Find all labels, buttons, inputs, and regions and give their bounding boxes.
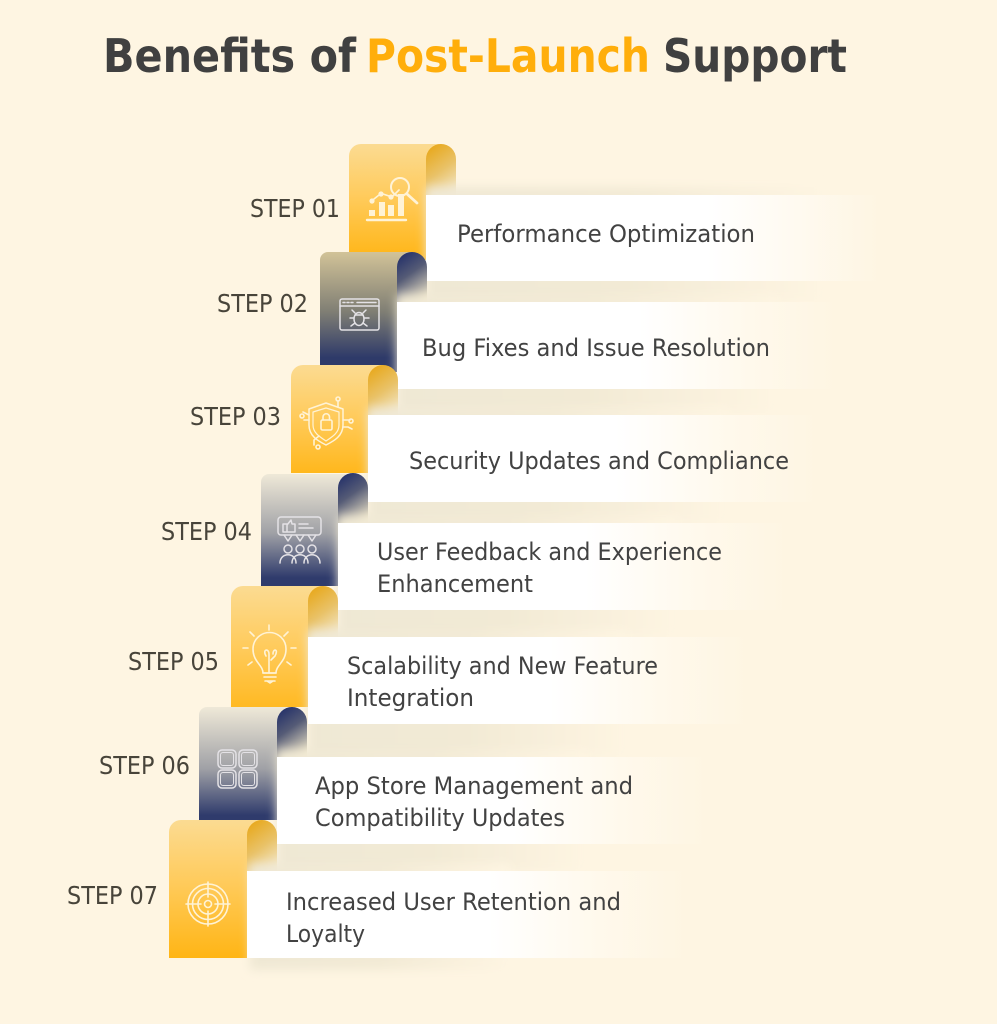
heading line 2: Integration <box>347 684 474 712</box>
ribbon <box>199 707 292 830</box>
icon: target <box>186 882 230 926</box>
step 03 <box>190 365 818 523</box>
heading: App Store Management and <box>315 772 633 800</box>
bar shadow <box>250 864 510 970</box>
text bar <box>247 871 687 958</box>
text bar <box>277 757 707 844</box>
ribbon fold <box>247 820 277 874</box>
ribbon fold <box>397 252 427 305</box>
step 07 <box>67 820 687 970</box>
label: STEP 07 <box>67 881 158 910</box>
heading line 2: Compatibility Updates <box>315 804 565 832</box>
bar shadow <box>426 187 826 301</box>
label: STEP 01 <box>250 194 340 223</box>
step 05 <box>128 586 748 757</box>
heading: Performance Optimization <box>457 220 755 248</box>
ribbon <box>291 365 383 480</box>
text bar <box>338 523 788 610</box>
step 04 <box>161 473 788 637</box>
icon: feedback and people <box>278 517 321 563</box>
label: STEP 06 <box>99 751 190 780</box>
text bar <box>397 302 837 389</box>
ribbon <box>169 820 262 958</box>
ribbon fold <box>426 144 456 198</box>
bar shadow <box>308 630 628 757</box>
label: STEP 02 <box>217 289 308 318</box>
label: STEP 03 <box>190 402 281 431</box>
step 02 <box>217 252 837 413</box>
ribbon fold <box>368 365 398 418</box>
ribbon <box>320 252 412 372</box>
heading: Security Updates and Compliance <box>409 447 789 475</box>
step 01 <box>250 144 880 301</box>
ribbon fold <box>338 473 368 526</box>
icon: shield with lock <box>300 397 353 449</box>
bar shadow <box>397 295 777 413</box>
ribbon <box>261 474 353 592</box>
text bar <box>308 637 748 724</box>
ribbon <box>349 144 441 260</box>
heading: User Feedback and Experience <box>377 538 722 566</box>
heading line 2: Loyalty <box>286 920 365 948</box>
icon: browser with bug <box>340 299 379 330</box>
text bar <box>426 195 880 281</box>
heading: Scalability and New Feature <box>347 652 658 680</box>
title: Support <box>663 29 847 83</box>
label: STEP 05 <box>128 647 219 676</box>
heading: Increased User Retention and <box>286 888 621 916</box>
icon: app grid <box>218 750 257 788</box>
bar shadow <box>277 750 587 871</box>
heading line 2: Enhancement <box>377 570 533 598</box>
step 06 <box>99 707 707 871</box>
bar shadow <box>338 516 678 637</box>
ribbon <box>231 586 323 722</box>
title: Benefits of <box>103 29 357 83</box>
label: STEP 04 <box>161 517 252 546</box>
bar shadow <box>368 408 728 523</box>
icon: chart with magnifier <box>367 178 417 220</box>
text bar <box>368 415 818 502</box>
ribbon fold <box>308 586 338 640</box>
title: Post-Launch <box>366 29 650 83</box>
icon: light bulb <box>243 625 296 683</box>
ribbon fold <box>277 707 307 760</box>
heading: Bug Fixes and Issue Resolution <box>422 334 770 362</box>
